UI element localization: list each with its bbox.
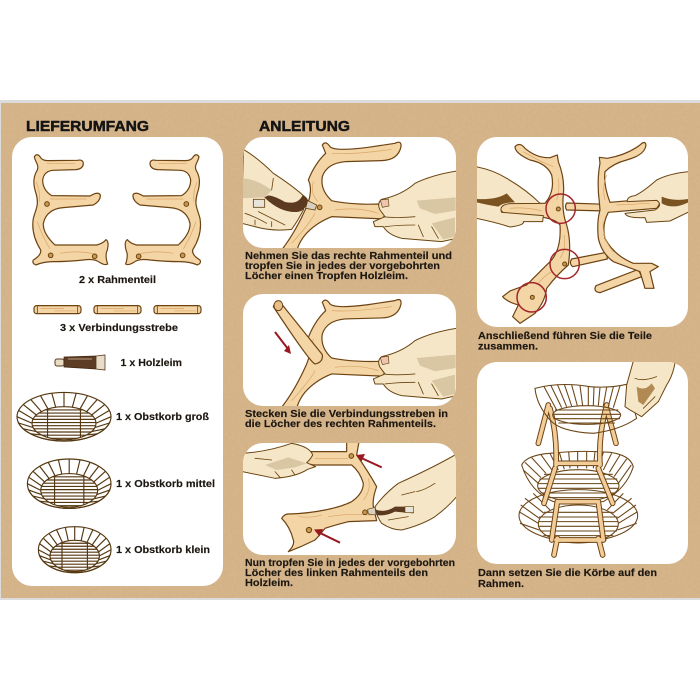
text: step 5: Rahmen. (478, 578, 524, 590)
marker: lower joint (517, 283, 546, 312)
frame legs (538, 405, 616, 555)
text: step 4: Anschließend führen Sie die Teile (478, 330, 652, 342)
panel: step 1 illustration (242, 137, 457, 252)
marker: upper joint (546, 194, 575, 223)
label: small basket: 1 x Obstkorb klein (116, 544, 210, 556)
text: step 4: zusammen. (478, 340, 538, 352)
label: medium basket: 1 x Obstkorb mittel (116, 478, 215, 490)
icon: medium basket (27, 459, 111, 508)
strut: bottom (595, 269, 642, 293)
text: step 1: Nehmen Sie das rechte Rahmenteil und (245, 250, 452, 262)
text: step 3: Nun tropfen Sie in jedes der vorgebohrten (245, 557, 455, 569)
text: step 1: tropfen Sie in jedes der vorgebohrten (245, 260, 440, 272)
arrow: insert strut (275, 332, 291, 354)
panel: step 2 illustration (243, 294, 457, 409)
label: Verbindungsstrebe: 3 x Verbindungsstrebe (60, 322, 178, 334)
strut: middle (570, 252, 607, 267)
left hand (476, 167, 543, 227)
text: step 2: Stecken Sie die Verbindungsstreben in (245, 408, 448, 420)
text: step 3: Löcher des linken Rahmenteils den (245, 567, 428, 579)
icon: small basket (38, 527, 111, 573)
panel: step 5 illustration (477, 361, 688, 564)
right frame part (598, 142, 660, 288)
marker: middle joint (550, 249, 579, 279)
label: Rahmenteil: 2 x Rahmenteil (79, 274, 156, 286)
text: step 1 (245, 250, 452, 282)
left frame part (500, 145, 570, 323)
arrow: upper hole (356, 454, 382, 467)
icon: large basket (17, 392, 111, 441)
hand holding basket (625, 361, 675, 417)
label: Holzleim: 1 x Holzleim (120, 357, 182, 369)
icon: two frame parts (33, 155, 201, 265)
panel: step 3 illustration (242, 442, 457, 555)
text: step 5: Dann setzen Sie die Körbe auf den (478, 567, 657, 579)
icon: glue tube (55, 355, 105, 370)
text: step 1: Löcher einen Tropfen Holzleim. (245, 270, 408, 282)
strut: top (565, 203, 607, 211)
panel: parts list (12, 137, 223, 586)
kraft paper background (0, 100, 700, 600)
bottom basket (519, 490, 638, 543)
text: step 4 (478, 330, 652, 352)
text: step 2: die Löcher des rechten Rahmenteils. (245, 418, 436, 430)
right hand (625, 172, 689, 222)
top basket (535, 384, 637, 433)
icon: three connecting struts (34, 306, 201, 314)
text: step 3 (245, 557, 455, 589)
heading: Anleitung: ANLEITUNG (259, 119, 350, 135)
panel: step 4 illustration (476, 137, 689, 327)
text: step 2 (245, 408, 448, 430)
arrow: lower hole (314, 529, 340, 543)
label: large basket: 1 x Obstkorb groß (116, 411, 210, 423)
text: step 5 (478, 567, 657, 590)
middle basket (522, 451, 633, 502)
heading: Lieferumfang: LIEFERUMFANG (26, 119, 149, 135)
text: step 3: Holzleim. (245, 577, 293, 589)
right hand shadow (662, 197, 688, 206)
left hand shadow (477, 193, 515, 207)
